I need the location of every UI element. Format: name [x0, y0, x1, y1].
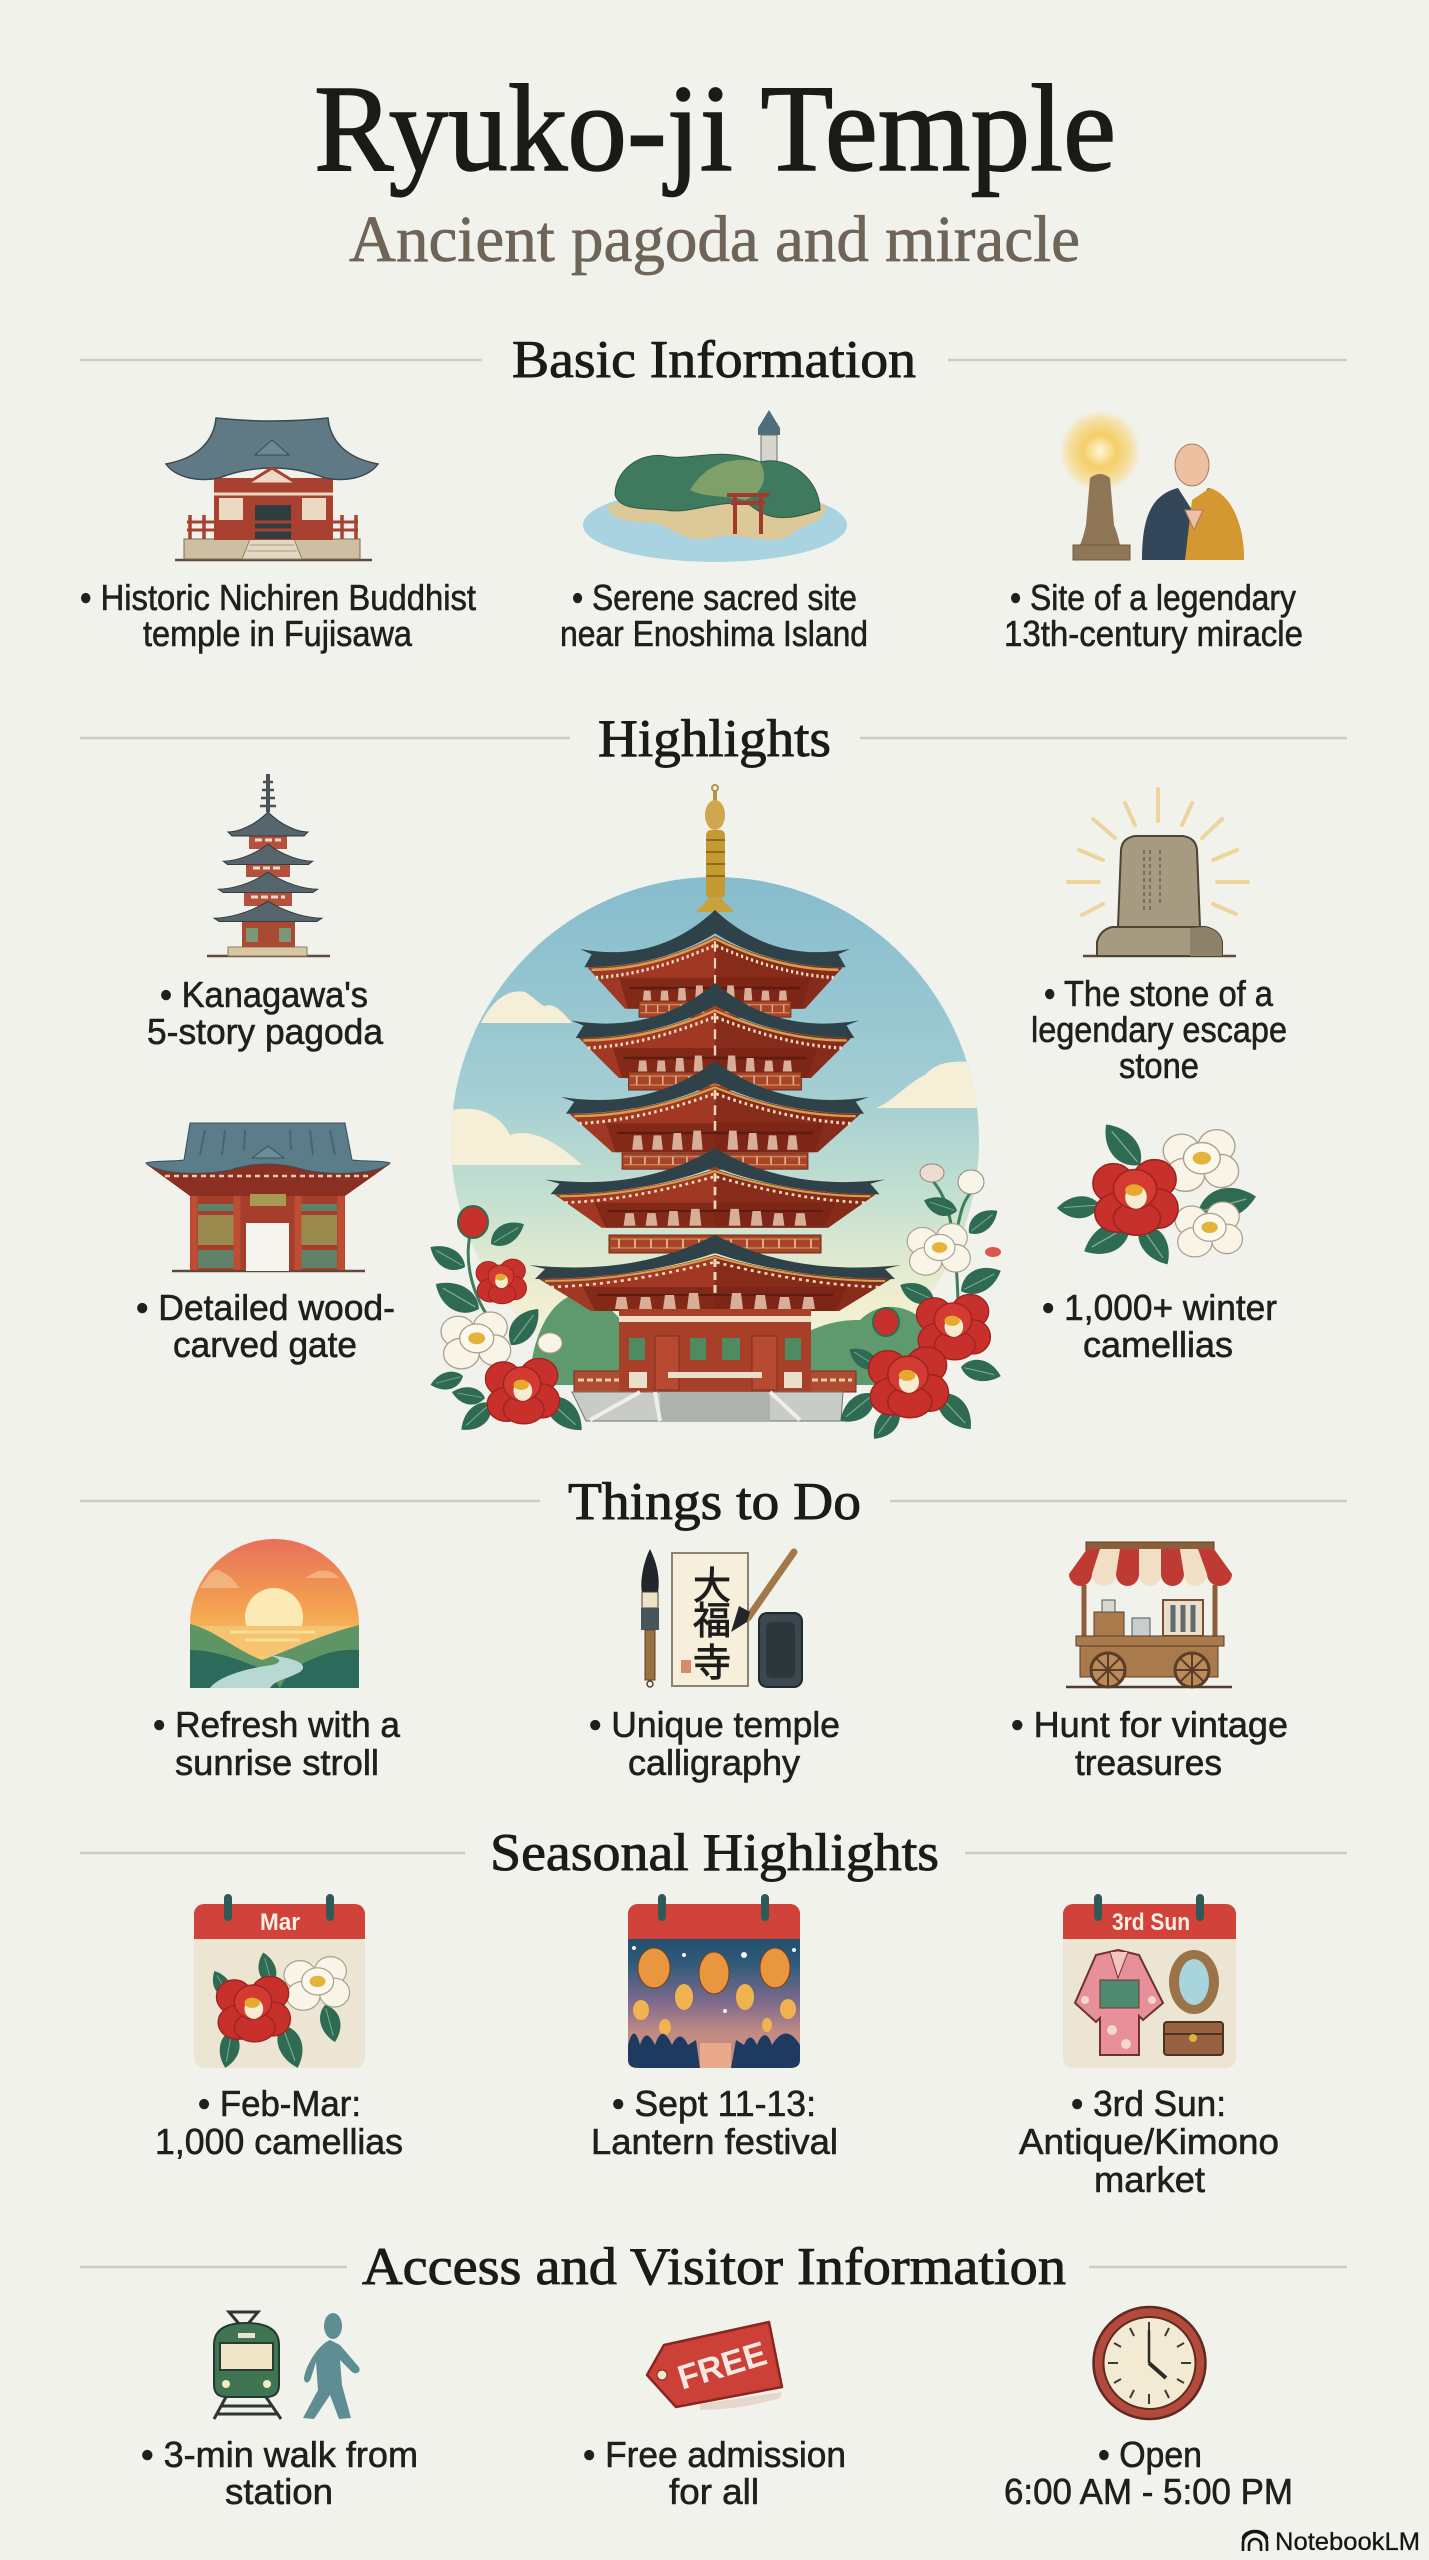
- notebooklm attribution: NotebookLM: [1275, 2528, 1420, 2556]
- text: carved gate: • Detailed wood-: [136, 1287, 395, 1328]
- icon: enoshima island: [583, 410, 847, 562]
- text: third sunday market: • 3rd Sun:: [1071, 2083, 1226, 2124]
- icon: winter camellias: [1056, 1117, 1260, 1271]
- balcony 4: [622, 1153, 808, 1169]
- heading: things to do: Things to Do: [568, 1473, 861, 1531]
- text: sacred site: near Enoshima Island: [560, 613, 868, 654]
- text: vintage treasures: treasures: [1075, 1742, 1222, 1783]
- text: vintage treasures: • Hunt for vintage: [1011, 1704, 1288, 1745]
- icon: carved gate: [146, 1123, 390, 1271]
- text: calligraphy: calligraphy: [628, 1742, 800, 1783]
- text: opening hours: [1004, 2434, 1293, 2512]
- text: sept lantern festival: • Sept 11-13:: [612, 2083, 816, 2124]
- text: 5-story pagoda: • Kanagawa's: [160, 974, 368, 1015]
- icon: calligraphy set: [641, 1549, 802, 1687]
- tier 3: [561, 1061, 869, 1152]
- heading: highlights: Highlights: [598, 710, 831, 768]
- text: opening hours: • Open: [1098, 2434, 1202, 2475]
- text: escape stone: [1031, 973, 1287, 1086]
- text: sacred site: • Serene sacred site: [572, 577, 857, 618]
- text: winter camellias: • 1,000+ winter: [1042, 1287, 1277, 1328]
- icon: miracle light and monk: [1059, 410, 1244, 560]
- balcony 2: [639, 1001, 791, 1017]
- subtitle: Ancient pagoda and miracle: [349, 203, 1080, 276]
- ground storey: [572, 1309, 856, 1421]
- text: sept lantern festival: [591, 2083, 838, 2162]
- sky circle: [451, 877, 979, 1336]
- text: winter camellias: [1042, 1287, 1277, 1365]
- illustration: five-story pagoda with camellias: [425, 785, 1006, 1445]
- icon: free admission tag: FREE: [673, 2335, 771, 2397]
- text: calligraphy: • Unique temple: [589, 1704, 840, 1745]
- icon: tram and walker: [214, 2312, 360, 2419]
- text: calligraphy: [589, 1704, 840, 1783]
- icon: market calendar: 3rd Sun: [1112, 1909, 1190, 1936]
- text: nichiren temple: [80, 577, 476, 654]
- icon: lantern festival calendar: [628, 1898, 800, 2068]
- icon: vintage market cart: [1066, 1542, 1232, 1687]
- icon: free admission tag: [647, 2322, 782, 2410]
- heading: seasonal highlights: Seasonal Highlights: [490, 1824, 939, 1882]
- text: sunrise stroll: • Refresh with a: [153, 1704, 401, 1745]
- text: 5-story pagoda: 5-story pagoda: [147, 1011, 384, 1052]
- text: legendary miracle: [1004, 577, 1303, 654]
- text: free admission: [583, 2434, 846, 2512]
- text: vintage treasures: [1011, 1704, 1288, 1783]
- tier 5: [529, 1235, 901, 1311]
- text: feb-mar camellias: • Feb-Mar:: [198, 2083, 361, 2124]
- tier 2: [571, 983, 859, 1078]
- text: sunrise stroll: sunrise stroll: [175, 1742, 379, 1783]
- balcony 3: [629, 1072, 801, 1090]
- spire: [696, 785, 734, 912]
- icon: calligraphy set: 福: [693, 1601, 731, 1643]
- text: winter camellias: camellias: [1083, 1324, 1233, 1365]
- text: escape stone: stone: [1119, 1045, 1199, 1086]
- text: nichiren temple: • Historic Nichiren Buddhist: [80, 577, 476, 618]
- text: escape stone: legendary escape: [1031, 1009, 1287, 1050]
- text: free admission: • Free admission: [583, 2434, 846, 2475]
- text: legendary miracle: 13th-century miracle: [1004, 613, 1303, 654]
- icon: temple hall: [166, 418, 378, 560]
- text: free admission: for all: [669, 2471, 759, 2512]
- text: sept lantern festival: Lantern festival: [591, 2121, 838, 2162]
- camellias right: [834, 1164, 1006, 1445]
- text: third sunday market: Antique/Kimono: [1019, 2121, 1279, 2162]
- text: third sunday market: [1019, 2083, 1279, 2200]
- text: nichiren temple: temple in Fujisawa: [143, 613, 413, 654]
- icon: calligraphy set: 大: [693, 1566, 731, 1608]
- panel: seasonal highlights: [80, 1824, 1347, 2200]
- tier 4: [545, 1148, 885, 1228]
- icon: glowing stone: [1068, 789, 1248, 956]
- text: third sunday market: market: [1094, 2159, 1205, 2200]
- panel: things to do: [80, 1473, 1347, 1783]
- heading: basic information: Basic Information: [512, 331, 916, 389]
- hills: [530, 1293, 940, 1385]
- text: sacred site: [560, 577, 868, 654]
- text: carved gate: carved gate: [173, 1324, 357, 1365]
- icon: small pagoda: [207, 774, 330, 956]
- text: opening hours: 6:00 AM - 5:00 PM: [1004, 2471, 1293, 2512]
- text: carved gate: [136, 1287, 395, 1365]
- text: sunrise stroll: [153, 1704, 401, 1783]
- text: walk from station: • 3-min walk from: [141, 2434, 418, 2475]
- text: walk from station: station: [225, 2471, 333, 2512]
- text: escape stone: • The stone of a: [1044, 973, 1274, 1014]
- icon: sunrise: [190, 1539, 359, 1688]
- panel: highlights: [80, 710, 1347, 1445]
- icon: march calendar: Mar: [260, 1909, 300, 1936]
- text: legendary miracle: • Site of a legendary: [1010, 577, 1296, 618]
- icon: march calendar: [194, 1898, 365, 2072]
- icon: market calendar: [1063, 1898, 1236, 2068]
- balcony 5: [609, 1235, 821, 1253]
- icon: calligraphy set: 寺: [693, 1643, 731, 1685]
- tier 1: [580, 910, 850, 1009]
- icon: clock: [1094, 2307, 1206, 2419]
- text: feb-mar camellias: [155, 2083, 403, 2162]
- text: 5-story pagoda: [147, 974, 384, 1052]
- text: feb-mar camellias: 1,000 camellias: [155, 2121, 403, 2162]
- panel: basic information: [80, 331, 1347, 654]
- text: walk from station: [141, 2434, 418, 2512]
- title: Ryuko-ji Temple: [314, 60, 1116, 197]
- camellias left: [425, 1206, 590, 1438]
- panel: access and visitor information: [80, 2238, 1347, 2512]
- heading: access and visitor information: Access and Visitor Information: [362, 2238, 1066, 2296]
